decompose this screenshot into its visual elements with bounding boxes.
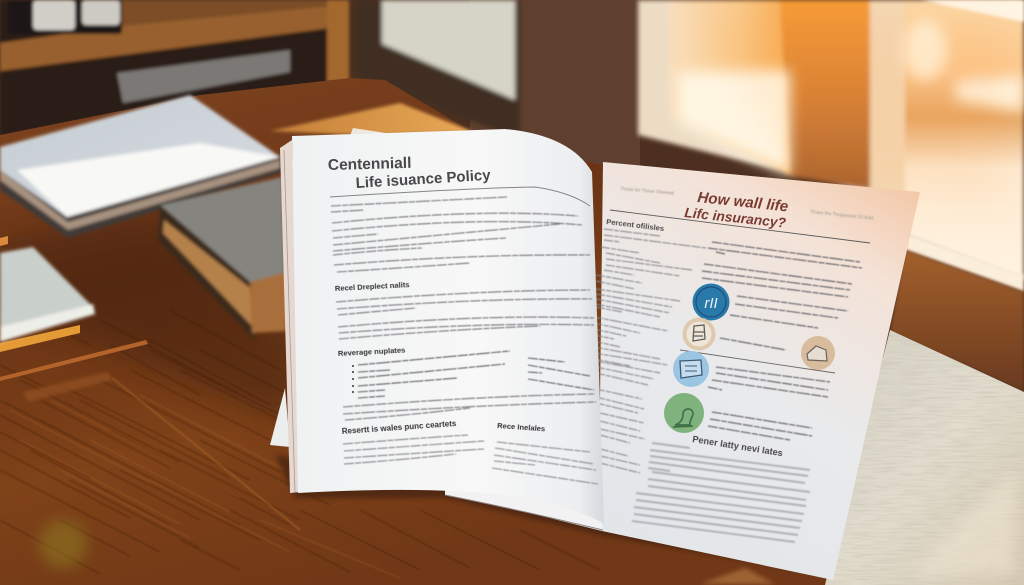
light woven cloth at right <box>825 330 1024 585</box>
lower text block <box>632 443 810 542</box>
small sheet behind booklet <box>350 128 386 136</box>
right page rule <box>610 210 870 243</box>
right page title: Lifc insurancy? <box>684 205 787 231</box>
section heading: coverage: Reverage nuplates <box>338 345 406 358</box>
wood grain light <box>10 395 400 578</box>
right page small headers: Those for Those Sheeted <box>620 186 675 197</box>
notebook top left <box>0 95 283 238</box>
back wall <box>0 0 1024 400</box>
right page left heading: Percent ofilisles <box>606 217 665 233</box>
right page <box>445 162 920 580</box>
right page upper text <box>702 242 862 297</box>
window glow <box>700 20 1000 200</box>
icon: tan document circle <box>682 318 716 350</box>
right page left column text <box>594 229 706 473</box>
booklet shadow <box>275 455 830 570</box>
section heading: project: Recel Dreplect nalits <box>335 280 410 293</box>
left page title <box>328 155 492 192</box>
lower heading: Pener latty nevi lates <box>692 434 784 458</box>
bottom right text <box>492 442 598 484</box>
icon: blue circle: rII <box>704 295 718 312</box>
icon: blue circle <box>692 284 730 320</box>
left page title: Centenniall <box>328 155 412 174</box>
sunlight patches on desk <box>0 103 775 584</box>
icon text rows <box>708 296 848 440</box>
lower curled page edge <box>445 489 603 530</box>
left page rule <box>330 187 590 206</box>
wooden desk <box>0 78 840 585</box>
right page small headers: Thase the Trespected 10 Itold <box>810 209 874 222</box>
icon: tan folder circle <box>801 336 835 370</box>
left window <box>355 0 520 140</box>
intro paragraph <box>331 197 590 272</box>
icon: light blue circle <box>673 351 709 387</box>
left page title: Life isuance Policy <box>355 167 492 192</box>
small notebook left <box>0 247 95 342</box>
left page stack edge <box>270 140 300 493</box>
section heading: rates: Resertt is wales punc ceartets <box>342 419 457 436</box>
divider <box>680 350 835 373</box>
right page small headers <box>620 186 874 222</box>
closed hardback book <box>158 177 287 340</box>
closing paragraph <box>343 394 596 420</box>
bottom left text <box>343 435 484 464</box>
left page <box>292 129 604 524</box>
bullet list left <box>352 351 510 398</box>
section paragraphs <box>336 290 594 339</box>
main window with sunset glow <box>638 0 1024 392</box>
wooden shelf with items <box>0 0 350 140</box>
section heading: details: Rece Inelales <box>497 421 545 433</box>
wood grain dark <box>0 280 600 574</box>
bullet list right <box>528 358 594 390</box>
right page title <box>684 189 790 231</box>
right page title: How wall life <box>697 189 790 216</box>
icon: green circle <box>664 393 704 433</box>
